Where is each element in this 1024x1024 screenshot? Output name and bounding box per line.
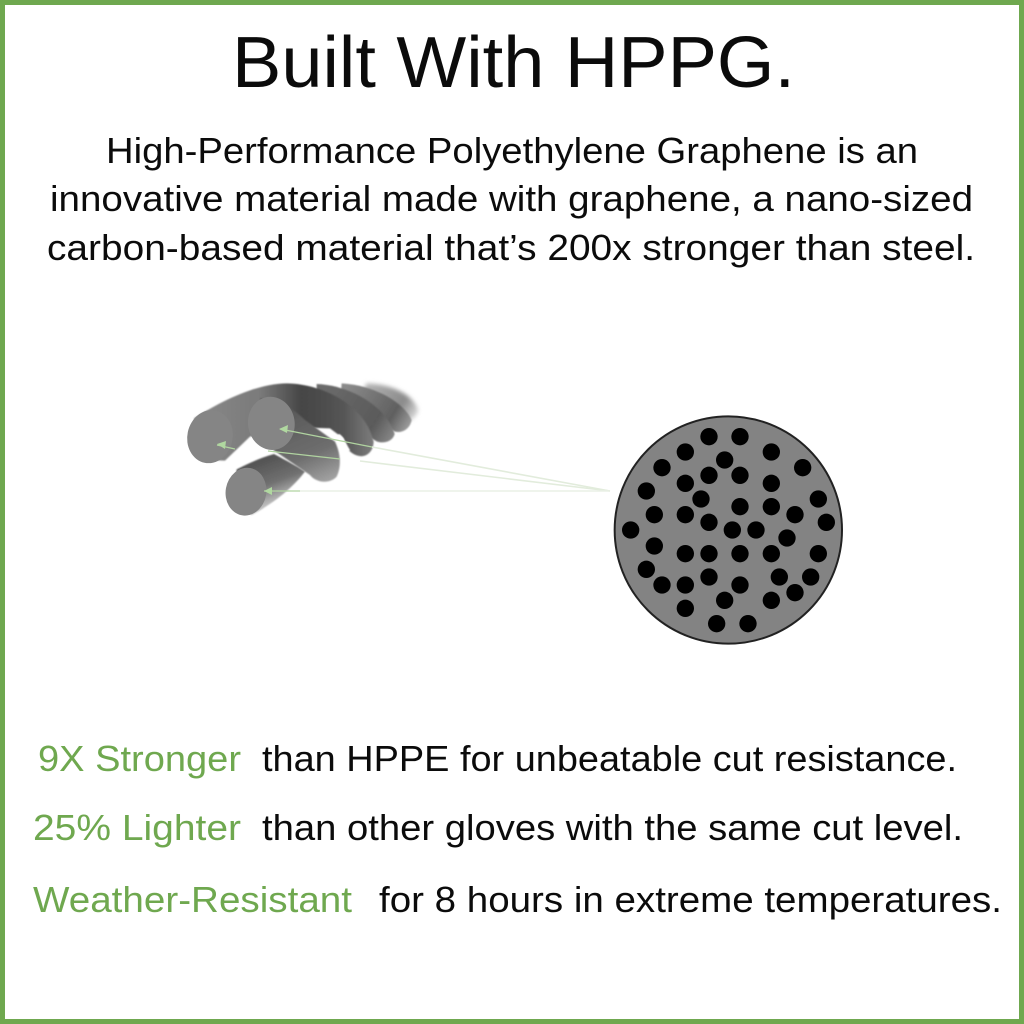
illustration: twisted rope strands	[182, 383, 418, 519]
strand end: lower	[222, 464, 270, 519]
main arched strand	[194, 383, 374, 461]
strand end: centre	[245, 394, 298, 453]
centre strand body	[260, 398, 340, 482]
intro text block	[47, 130, 975, 268]
title: Built With HPPG.	[232, 23, 795, 103]
benefit: 9X stronger: than HPPE for unbeatable cut resistance.	[262, 738, 957, 779]
illustration: fibre cross-section	[615, 416, 842, 644]
lower strand body	[233, 454, 305, 515]
white gap between strands	[336, 434, 350, 453]
intro text block: High-Performance Polyethylene Graphene is an	[106, 130, 918, 171]
intro text block: carbon-based material that’s 200x stronger than steel.	[47, 227, 975, 268]
benefit: weather-resistant	[33, 879, 1002, 920]
benefit: 25% lighter: than other gloves with the same cut level.	[262, 807, 963, 848]
arrows: strand to cross-section	[217, 425, 610, 495]
benefit: weather-resistant: Weather-Resistant	[33, 879, 352, 920]
rear strand 3	[357, 383, 418, 420]
rear strand 1	[317, 384, 395, 442]
benefit: 9X stronger: 9X Stronger	[38, 738, 241, 779]
benefit: weather-resistant: for 8 hours in extreme temperatures.	[379, 879, 1002, 920]
benefit: 25% lighter: 25% Lighter	[33, 807, 241, 848]
rear strand 2	[340, 383, 412, 432]
strand end: left	[182, 406, 238, 467]
intro text block: innovative material made with graphene, a nano-sized	[50, 178, 973, 219]
